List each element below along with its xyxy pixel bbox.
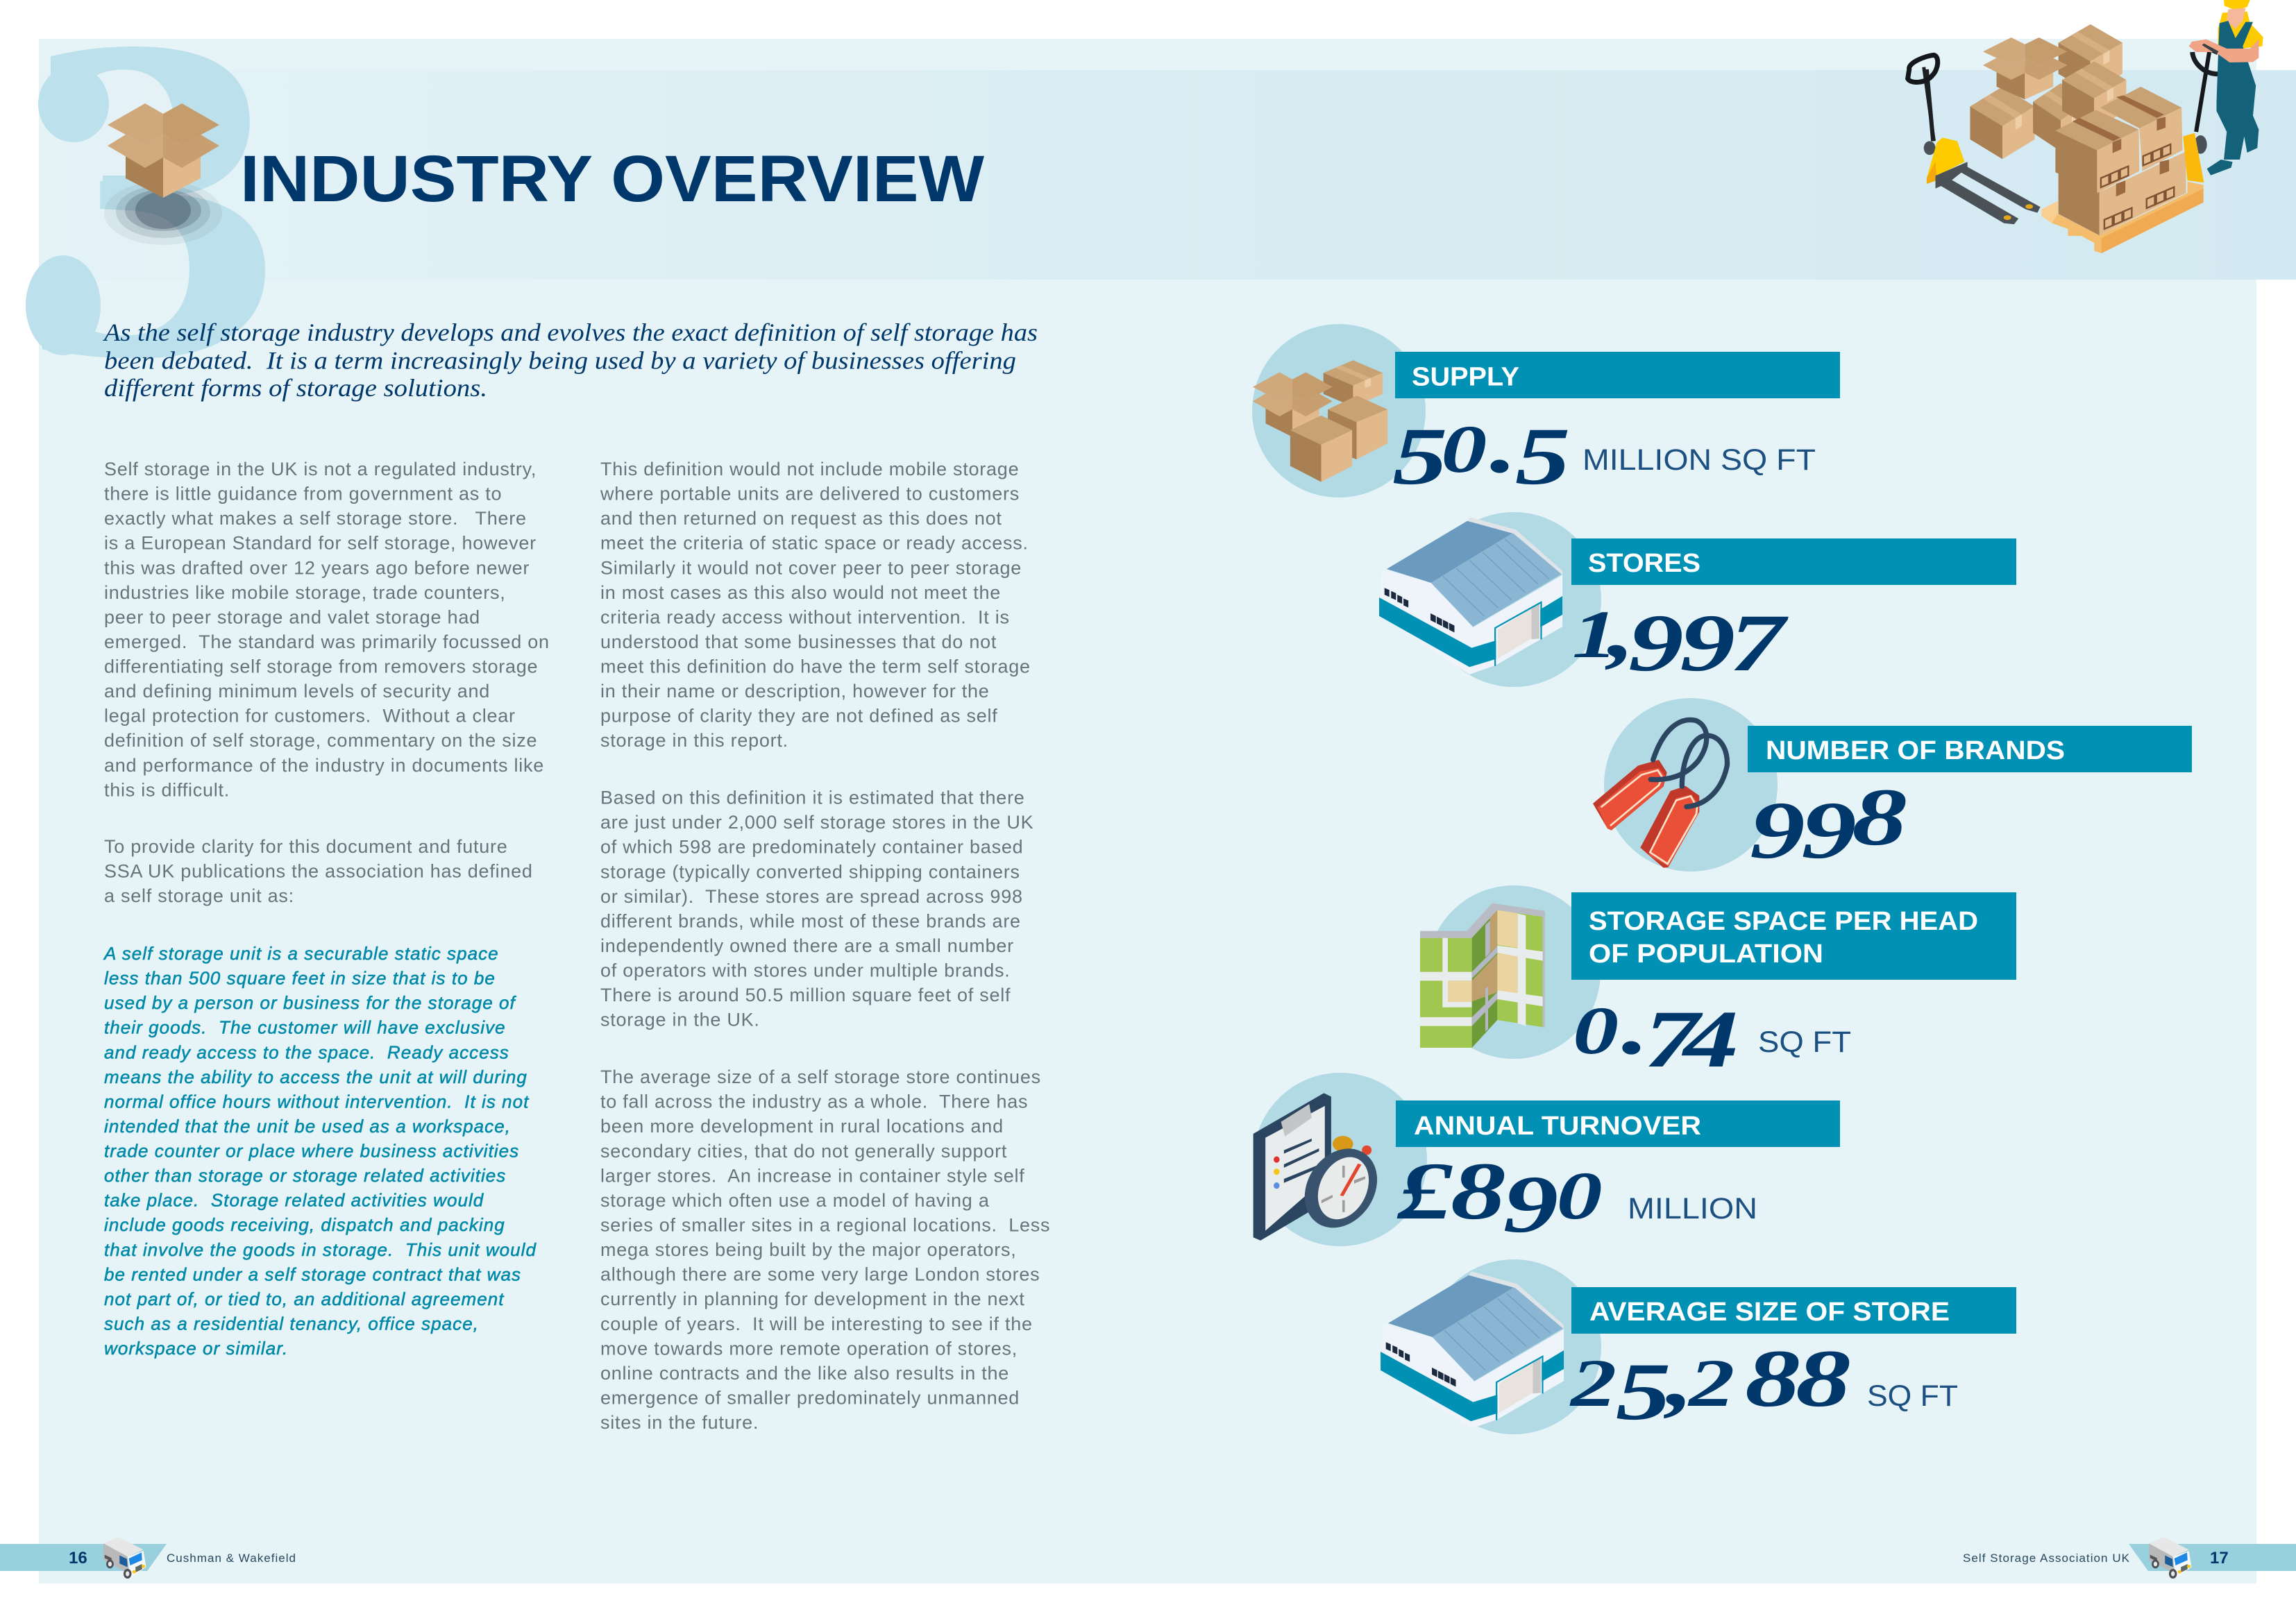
bar: annual turnover: [1396, 1101, 1840, 1147]
body text: left column paragraph 2: To provide clarity for this document and future: [104, 836, 508, 857]
icon: van: [103, 1537, 146, 1579]
value: 0.74 sq ft: .: [1621, 981, 1649, 1071]
value: 890 million: 9: [1503, 1159, 1558, 1250]
body text: left column paragraph 1: there is little guidance from government as to: [104, 484, 502, 504]
body text: right column paragraph 3: storage which often use a model of having a: [600, 1190, 990, 1211]
body text: left column paragraph 1: this was drafted over 12 years ago before newer: [104, 557, 530, 578]
footer: left page strip: 16: [69, 1549, 87, 1567]
back boxes: [1970, 24, 2126, 159]
icon: red tags: [1593, 720, 1727, 868]
panel: annual turnover stat: MILLION: [1628, 1192, 1757, 1225]
body text: right column paragraph 2: are just under 2,000 self storage stores in the UK: [600, 812, 1033, 833]
body text: right column paragraph 2: of operators with stores under multiple brands.: [600, 960, 1011, 981]
body text: right column paragraph 2: of which 598 are predominately container based: [600, 837, 1023, 858]
body text: right column paragraph 1: in most cases as this also would not meet the: [600, 582, 1001, 603]
value: 25,288 sq ft: 5: [1616, 1347, 1671, 1437]
body text: left column paragraph 1: peer to peer storage and valet storage had: [104, 606, 480, 627]
bar: storage space per head: [1571, 892, 2016, 980]
value: 890 million: 8: [1451, 1146, 1506, 1237]
value: 0.74 sq ft: 7: [1644, 994, 1703, 1085]
body text: right column paragraph 2: There is around 50.5 million square feet of self: [600, 985, 1011, 1005]
panel: average size of store stat: SQ FT: [1867, 1379, 1958, 1413]
body text: right column paragraph 2: storage (typically converted shipping containers: [600, 861, 1020, 882]
wooden pallet: [2042, 182, 2204, 253]
intro paragraph: been debated. It is a term increasingly being used by a variety of businesses offering: [104, 347, 1016, 375]
intro paragraph: As the self storage industry develops and evolves the exact definition of self storage has: [103, 318, 1038, 346]
definition callout in teal italic: that involve the goods in storage. This unit would: [104, 1239, 537, 1260]
value: 890 million: 0: [1557, 1158, 1603, 1234]
footer: right page strip: 17: [2210, 1549, 2229, 1567]
body text: right column paragraph 3: secondary cities, that do not generally support: [600, 1141, 1007, 1162]
definition callout in teal italic: such as a residential tenancy, office space,: [104, 1314, 479, 1334]
body text: right column paragraph 1: This definition would not include mobile storage: [600, 459, 1019, 479]
body text: right column paragraph 1: understood that some businesses that do not: [600, 631, 997, 652]
body text: right column paragraph 3: although there are some very large London stores: [600, 1264, 1040, 1285]
definition callout in teal italic: A self storage unit is a securable static space: [103, 943, 499, 964]
value: 998: 9: [1801, 785, 1857, 876]
panel: supply stat: [1252, 324, 1840, 502]
value: 1,997: 9: [1680, 598, 1735, 688]
panel: annual turnover stat: ANNUAL TURNOVER: [1414, 1112, 1701, 1141]
body text: right column paragraph 1: and then returned on request as this does not: [600, 508, 1002, 529]
body text: left column paragraph 1: industries like mobile storage, trade counters,: [104, 582, 506, 603]
definition callout in teal italic: used by a person or business for the storage of: [104, 992, 517, 1013]
panel: average size of store stat: [1381, 1259, 2016, 1437]
body text: right column paragraph 1: where portable units are delivered to customers: [600, 484, 1020, 504]
body text: right column paragraph 1: in their name or description, however for the: [600, 681, 990, 702]
body text: right column paragraph 3: mega stores being built by the major operators,: [600, 1239, 1017, 1260]
header band: [39, 70, 2296, 280]
value: 25,288 sq ft: ,: [1663, 1334, 1694, 1424]
definition callout in teal italic: not part of, or tied to, an additional agreement: [104, 1289, 505, 1309]
body text: left column paragraph 2: a self storage unit as:: [104, 885, 294, 906]
icon: warehouse: [1381, 1271, 1564, 1429]
definition callout in teal italic: trade counter or place where business activities: [104, 1141, 519, 1162]
panel: stores stat: [1379, 512, 2016, 688]
intro paragraph: different forms of storage solutions.: [104, 374, 487, 402]
body text: right column paragraph 1: Similarly it would not cover peer to peer storage: [600, 557, 1022, 578]
body text: left column paragraph 1: is a European Standard for self storage, however: [104, 533, 537, 554]
value: 998: 8: [1852, 772, 1907, 863]
definition callout in teal italic: take place. Storage related activities would: [104, 1190, 484, 1211]
body text: left column paragraph 1: legal protection for customers. Without a clear: [104, 706, 516, 726]
worker: [2189, 0, 2263, 176]
value: 890 million: £: [1396, 1146, 1453, 1237]
body text: left column paragraph 1: definition of self storage, commentary on the size: [104, 730, 537, 751]
right pallet truck handle: [2193, 45, 2226, 154]
value: 50.5 million sq ft: .: [1489, 400, 1517, 490]
panel: number of brands stat: [1593, 698, 2192, 876]
value: 25,288 sq ft: 2: [1569, 1345, 1617, 1421]
value: 25,288 sq ft: 8: [1745, 1334, 1800, 1424]
body text: right column paragraph 1: meet this definition do have the term self storage: [600, 656, 1031, 677]
icon: folded map: [1420, 903, 1545, 1048]
value: 1,997: ,: [1605, 585, 1635, 675]
body text: left column paragraph 1: and defining minimum levels of security and: [104, 681, 490, 702]
body text: right column paragraph 2: different brands, while most of these brands are: [600, 910, 1021, 931]
body text: left column paragraph 1: and performance of the industry in documents like: [104, 755, 544, 776]
definition callout in teal italic: and ready access to the space. Ready access: [104, 1042, 509, 1062]
body text: left column paragraph 1: emerged. The standard was primarily focussed on: [104, 631, 550, 652]
body text: right column paragraph 3: to fall across the industry as a whole. There has: [600, 1091, 1028, 1112]
body text: right column paragraph 3: online contracts and the like also results in the: [600, 1363, 1009, 1384]
bar: average size of store: [1571, 1287, 2016, 1334]
body text: right column paragraph 3: series of smaller sites in a regional locations. Less: [600, 1214, 1050, 1235]
body text: right column paragraph 1: meet the criteria of static space or ready access.: [600, 533, 1029, 554]
value: 0.74 sq ft: 0: [1573, 993, 1619, 1069]
panel: supply stat: MILLION SQ FT: [1582, 443, 1816, 477]
value: 1,997: 1: [1572, 597, 1618, 672]
left pallet truck: [1908, 55, 2041, 224]
definition callout in teal italic: their goods. The customer will have exclusive: [104, 1017, 506, 1038]
value: 50.5 million sq ft: 0: [1441, 411, 1487, 487]
body text: left column paragraph 1: exactly what makes a self storage store. There: [104, 508, 527, 529]
panel: storage space per head stat: STORAGE SPACE PER HEAD: [1589, 907, 1978, 936]
panel: storage space per head stat: SQ FT: [1758, 1026, 1851, 1059]
body text: right column paragraph 2: independently owned there are a small number: [600, 935, 1014, 956]
definition callout in teal italic: other than storage or storage related activities: [104, 1165, 506, 1186]
value: 25,288 sq ft: 8: [1796, 1334, 1851, 1424]
body text: right column paragraph 1: storage in this report.: [600, 730, 788, 751]
icon: warehouse: [1379, 517, 1562, 674]
value: 0.74 sq ft: 4: [1681, 994, 1739, 1085]
body text: right column paragraph 3: been more development in rural locations and: [600, 1116, 1004, 1137]
bar: supply: [1395, 352, 1840, 398]
panel: number of brands stat: NUMBER OF BRANDS: [1766, 736, 2065, 765]
value: 50.5 million sq ft: 5: [1392, 411, 1448, 502]
footer: right page strip: [1963, 1537, 2296, 1579]
right pallet truck yellow head: [2183, 133, 2204, 182]
body text: right column paragraph 3: sites in the future.: [600, 1412, 759, 1433]
panel: annual turnover stat: [1253, 1073, 1840, 1250]
footer: left page strip: [0, 1537, 296, 1579]
body text: right column paragraph 2: storage in the UK.: [600, 1010, 760, 1030]
body text: left column paragraph 1: Self storage in the UK is not a regulated industry,: [104, 459, 537, 479]
icon: cardboard boxes: [1253, 360, 1387, 482]
panel: average size of store stat: AVERAGE SIZE OF STORE: [1589, 1298, 1950, 1327]
icon: van: [2149, 1537, 2191, 1579]
panel: stores stat: STORES: [1588, 549, 1700, 578]
body text: right column paragraph 2: or similar). These stores are spread across 998: [600, 886, 1023, 907]
body text: right column paragraph 3: currently in planning for development in the next: [600, 1289, 1025, 1309]
icon: open box with shadow: [104, 103, 222, 245]
body text: right column paragraph 1: purpose of clarity they are not defined as self: [600, 706, 998, 726]
bar: stores: [1571, 538, 2016, 585]
body text: right column paragraph 3: emergence of smaller predominately unmanned: [600, 1387, 1020, 1408]
value: 998: 9: [1750, 785, 1805, 876]
front stacked boxes: [2055, 87, 2186, 235]
body text: right column paragraph 3: larger stores. An increase in container style self: [600, 1165, 1025, 1186]
definition callout in teal italic: less than 500 square feet in size that is to be: [104, 968, 496, 989]
title: INDUSTRY OVERVIEW: [240, 142, 984, 216]
definition callout in teal italic: workspace or similar.: [104, 1338, 288, 1359]
body text: right column paragraph 3: move towards more remote operation of stores,: [600, 1338, 1018, 1359]
body text: right column paragraph 3: couple of years. It will be interesting to see if the: [600, 1314, 1033, 1334]
definition callout in teal italic: means the ability to access the unit at will during: [104, 1067, 527, 1087]
definition callout in teal italic: be rented under a self storage contract that was: [104, 1264, 521, 1284]
icon: clipboard and stopwatch: [1253, 1093, 1386, 1241]
hero illustration: pallet truck, boxes and worker: [1908, 0, 2263, 253]
footer: left page strip: Cushman & Wakefield: [167, 1552, 296, 1565]
intro paragraph: [103, 318, 1038, 402]
bar: number of brands: [1748, 726, 2192, 772]
value: 1,997: 9: [1628, 598, 1684, 688]
body text: right column paragraph 2: Based on this definition it is estimated that there: [600, 788, 1025, 808]
body text: left column paragraph 1: this is difficult.: [104, 779, 230, 800]
value: 1,997: 7: [1730, 598, 1789, 688]
panel: storage space per head stat: [1420, 885, 2016, 1085]
body text: right column paragraph 3: The average size of a self storage store continues: [600, 1067, 1041, 1087]
panel: storage space per head stat: OF POPULATION: [1589, 940, 1823, 969]
value: 50.5 million sq ft: 5: [1515, 411, 1570, 502]
footer: right page strip: Self Storage Association UK: [1963, 1552, 2130, 1565]
body text: left column paragraph 1: differentiating self storage from removers storage: [104, 656, 538, 677]
body text: right column paragraph 1: criteria ready access without intervention. It is: [600, 606, 1010, 627]
panel: supply stat: SUPPLY: [1412, 362, 1519, 391]
value: 25,288 sq ft: 2: [1687, 1345, 1734, 1421]
body text: left column paragraph 2: SSA UK publications the association has defined: [104, 861, 533, 882]
definition callout in teal italic: include goods receiving, dispatch and packing: [104, 1214, 505, 1235]
definition callout in teal italic: intended that the unit be used as a workspace,: [104, 1116, 511, 1137]
definition callout in teal italic: normal office hours without intervention. It is not: [104, 1091, 530, 1112]
